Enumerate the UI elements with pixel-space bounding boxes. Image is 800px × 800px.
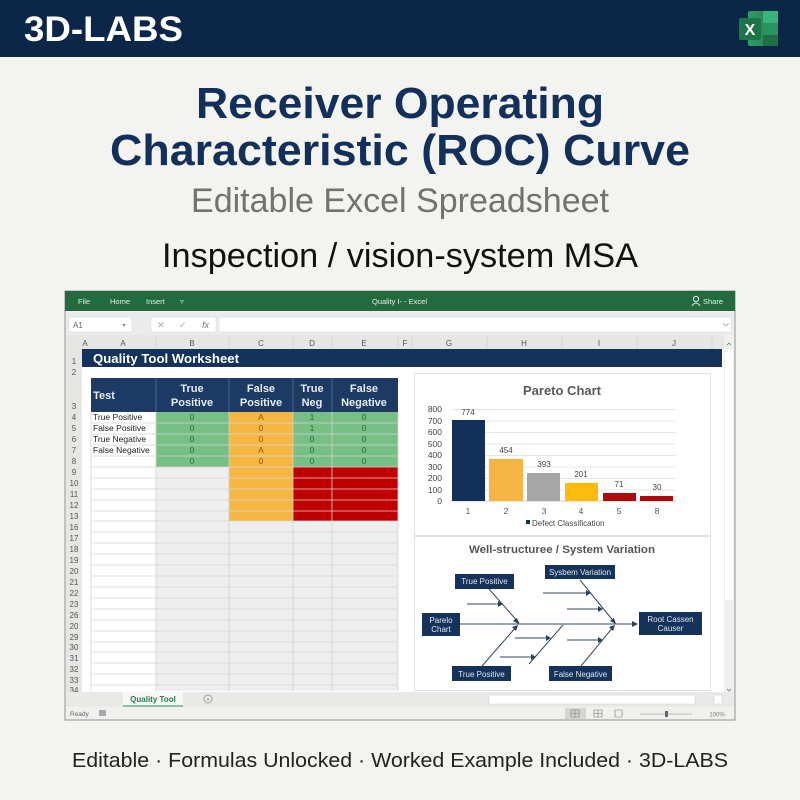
- bar chart: 1: [466, 506, 471, 516]
- cell values: 0: [190, 445, 195, 455]
- bar chart: 300: [428, 462, 442, 472]
- row labels: [93, 412, 150, 455]
- cell values: 0: [190, 412, 195, 422]
- fishbone labels: True Positive: [461, 577, 508, 586]
- cell values: 0: [310, 456, 315, 466]
- row labels: True Negative: [93, 434, 146, 444]
- panel: Pareto chart: [414, 374, 710, 536]
- bar chart: 4: [579, 506, 584, 516]
- row numbers: 30: [70, 643, 79, 652]
- cell values: 0: [310, 445, 315, 455]
- chart legend: Defect Classification: [532, 519, 604, 528]
- worksheet title band: Quality Tool Worksheet: [93, 352, 240, 366]
- row numbers: 22: [70, 589, 79, 598]
- title: Characteristic (ROC) Curve: [110, 126, 690, 175]
- status bar: [66, 707, 734, 719]
- cell values: 0: [310, 434, 315, 444]
- table header: Neg: [302, 397, 322, 409]
- fishbone labels: False Negative: [554, 670, 608, 679]
- column headers: A: [82, 339, 88, 348]
- cell values: 0: [259, 456, 264, 466]
- formula bar: [66, 311, 734, 335]
- row numbers: 19: [70, 556, 79, 565]
- bar chart: 600: [428, 427, 442, 437]
- sheet tab bar: Quality Tool: [130, 695, 176, 704]
- cell values: 0: [190, 456, 195, 466]
- icon: Excel logo: [739, 11, 778, 46]
- fishbone labels: Root Cassen: [647, 615, 694, 624]
- ribbon bar: Quality I- - Excel: [372, 297, 427, 306]
- row numbers: 12: [70, 501, 79, 510]
- table header: [91, 378, 398, 412]
- panel: Excel window: [65, 291, 735, 720]
- column headers: G: [446, 339, 452, 348]
- formula bar: fx: [202, 320, 210, 330]
- status bar: Ready: [70, 711, 90, 718]
- row numbers: 23: [70, 600, 79, 609]
- footer tagline: Editable · Formulas Unlocked · Worked Example Included · 3D-LABS: [72, 750, 728, 772]
- cell values: 0: [362, 434, 367, 444]
- row numbers: 20: [70, 622, 79, 631]
- row numbers: 20: [70, 567, 79, 576]
- fishbone labels: Chart: [431, 625, 452, 634]
- row numbers: [66, 349, 82, 695]
- table header: Test: [93, 390, 115, 402]
- column headers: C: [258, 339, 264, 348]
- row numbers: 9: [72, 468, 77, 477]
- ribbon bar: File: [78, 297, 90, 306]
- cell values: 0: [362, 445, 367, 455]
- cell values: [190, 412, 367, 466]
- subtitle: Editable Excel Spreadsheet: [191, 182, 610, 220]
- column headers: D: [309, 339, 315, 348]
- cell values: 1: [310, 423, 315, 433]
- cell values: 1: [310, 412, 315, 422]
- row numbers: 18: [70, 545, 79, 554]
- column headers: H: [521, 339, 527, 348]
- row labels: False Negative: [93, 445, 150, 455]
- cell values: 0: [190, 434, 195, 444]
- ribbon bar: ▿: [180, 297, 184, 306]
- title: [110, 79, 690, 175]
- column headers: [66, 335, 724, 349]
- panel: fishbone diagram: [414, 536, 710, 690]
- chart title: Pareto Chart: [523, 383, 602, 398]
- formula bar: A1: [73, 321, 83, 330]
- icon: Excel logo: X: [745, 22, 756, 39]
- table header: Negative: [341, 397, 387, 409]
- bar chart: 700: [428, 416, 442, 426]
- fishbone labels: [422, 565, 702, 681]
- brand name: 3D-LABS: [24, 10, 183, 49]
- fishbone labels: Parelo: [429, 616, 453, 625]
- table header: False: [247, 383, 275, 395]
- data table: [91, 378, 398, 691]
- grid lines: [91, 423, 398, 685]
- fishbone labels: True Positive: [458, 670, 505, 679]
- bar chart: 3: [542, 506, 547, 516]
- column headers: I: [598, 339, 600, 348]
- cell values: 0: [362, 456, 367, 466]
- column headers: A: [120, 339, 126, 348]
- bar chart: 774: [461, 408, 475, 417]
- row numbers: 6: [72, 435, 77, 444]
- row numbers: 11: [70, 490, 79, 499]
- sheet tab bar: +: [206, 698, 210, 704]
- worksheet area: [82, 349, 724, 692]
- column headers: E: [361, 339, 367, 348]
- status bar: 100%: [709, 712, 725, 718]
- bar chart: 0: [437, 496, 442, 506]
- sheet tab bar: [66, 692, 734, 707]
- table header: True: [300, 383, 324, 395]
- ribbon bar: Insert: [146, 297, 166, 306]
- cell values: 0: [259, 434, 264, 444]
- row labels: True Positive: [93, 412, 143, 422]
- bar chart: 8: [655, 506, 660, 516]
- use-case heading: Inspection / vision-system MSA: [162, 237, 638, 275]
- row numbers: 8: [72, 457, 77, 466]
- bar chart: 400: [428, 450, 442, 460]
- fishbone labels: Sysbem Variation: [549, 568, 611, 577]
- column headers: J: [672, 339, 676, 348]
- column headers: B: [189, 339, 195, 348]
- vertical scrollbar: [724, 335, 734, 692]
- formula bar: ✕: [157, 320, 165, 330]
- row labels: False Positive: [93, 423, 146, 433]
- row numbers: 7: [72, 446, 77, 455]
- ribbon bar: Share: [703, 297, 723, 306]
- table header: Positive: [240, 397, 282, 409]
- fishbone lines: [460, 580, 632, 666]
- fishbone arrowheads: [498, 590, 638, 660]
- row numbers: 4: [72, 413, 77, 422]
- diagram title: Well-structuree / System Variation: [469, 544, 655, 556]
- bar chart: 200: [428, 473, 442, 483]
- row numbers: 16: [70, 523, 79, 532]
- cell values: 0: [362, 412, 367, 422]
- bar chart: 393: [537, 460, 551, 469]
- worksheet title band: [82, 349, 722, 367]
- header bar: [0, 0, 800, 57]
- row numbers: 5: [72, 424, 77, 433]
- bar chart: 201: [574, 470, 588, 479]
- bar chart: [428, 404, 676, 528]
- column headers: F: [403, 339, 408, 348]
- cell values: 0: [190, 423, 195, 433]
- bar chart: 30: [653, 483, 662, 492]
- row numbers: 13: [70, 512, 79, 521]
- row numbers: 10: [70, 479, 79, 488]
- cell values: 0: [362, 423, 367, 433]
- row numbers: 17: [70, 534, 79, 543]
- table header: Positive: [171, 397, 213, 409]
- row numbers: 31: [70, 654, 79, 663]
- formula bar: ✓: [179, 320, 187, 330]
- formula bar: ▾: [122, 323, 126, 329]
- table header: True: [180, 383, 204, 395]
- bar chart: 500: [428, 439, 442, 449]
- bar chart: 2: [504, 506, 509, 516]
- cell values: A: [258, 445, 264, 455]
- row numbers: 34: [70, 686, 79, 695]
- row numbers: 1: [72, 357, 77, 366]
- table header: False: [350, 383, 378, 395]
- bar chart: 71: [615, 480, 624, 489]
- cell values: 0: [259, 423, 264, 433]
- ribbon bar: [65, 291, 735, 311]
- row numbers: 33: [70, 676, 79, 685]
- cell fills: [156, 412, 398, 691]
- row numbers: 29: [70, 633, 79, 642]
- row numbers: 26: [70, 611, 79, 620]
- row numbers: 2: [72, 368, 77, 377]
- fishbone labels: Causer: [658, 624, 684, 633]
- bar chart: 100: [428, 485, 442, 495]
- bar chart: 454: [499, 446, 513, 455]
- title: Receiver Operating: [196, 79, 604, 128]
- row numbers: 21: [70, 578, 79, 587]
- bar chart: 5: [617, 506, 622, 516]
- row numbers: 32: [70, 665, 79, 674]
- bar chart: 800: [428, 404, 442, 414]
- cell values: A: [258, 412, 264, 422]
- row numbers: 3: [72, 402, 77, 411]
- ribbon bar: Home: [110, 297, 130, 306]
